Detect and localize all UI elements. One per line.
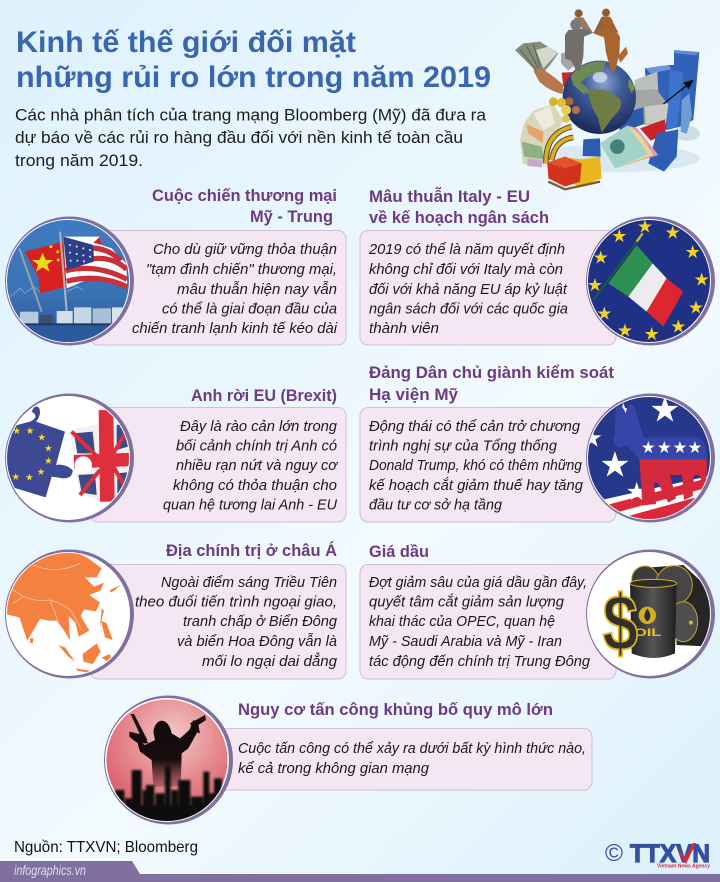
icon: EU and UK puzzle pieces: ★ xyxy=(26,426,34,436)
icon: oil barrels and dollar sign: $ xyxy=(603,579,638,668)
icon: Democratic donkey: ★ xyxy=(688,438,703,457)
card: oil text xyxy=(360,564,616,679)
card: trade war text xyxy=(90,230,346,345)
intro text: dự báo về các rủi ro hàng đầu đối với nền kinh tế toàn cầu xyxy=(15,128,463,147)
icon: Democratic donkey: ★ xyxy=(580,425,603,453)
icon: EU and UK puzzle pieces: ★ xyxy=(25,473,34,483)
icon: China and US flags over container ship xyxy=(0,216,135,348)
panel: oil price xyxy=(360,542,715,679)
intro text: trong năm 2019. xyxy=(15,151,143,170)
intro text xyxy=(15,106,487,170)
heading: trade war: Cuộc chiến thương mại xyxy=(152,186,337,205)
card: Brexit text: quan hệ tương lai Anh - EU xyxy=(163,496,337,514)
icon: Italian flag on EU stars: ★ xyxy=(688,297,704,317)
heading: Brexit: Anh rời EU (Brexit) xyxy=(191,386,337,405)
icon: Italian flag on EU stars: ★ xyxy=(617,321,633,341)
icon: Democratic donkey: ★ xyxy=(657,438,672,457)
header illustration: globe, trade and money xyxy=(515,9,700,189)
icon: map of Asia xyxy=(0,550,134,678)
card: oil text: Mỹ - Saudi Arabia và Mỹ - Iran xyxy=(369,633,562,650)
logo: TTXVN: TTXVN xyxy=(630,840,710,868)
card: Italy EU text: không chỉ đối với Italy mà còn xyxy=(369,261,563,278)
panel: Brexit xyxy=(5,386,346,522)
logo: TTXVN: © xyxy=(605,840,623,867)
panel: terror attack xyxy=(103,696,592,833)
icon: Democratic donkey: ★ xyxy=(599,446,631,485)
icon: EU and UK puzzle pieces: ★ xyxy=(37,433,46,443)
card: Asia text: Ngoài điểm sáng Triều Tiên xyxy=(161,574,337,591)
card: Brexit text: nhiều rạn nứt và nguy cơ xyxy=(176,457,339,474)
heading: Italy EU: Mâu thuẫn Italy - EU xyxy=(369,187,530,206)
intro text: Các nhà phân tích của trang mạng Bloomberg (Mỹ) đã đưa ra xyxy=(15,106,487,124)
card: oil text: quyết tâm cắt giảm sản lượng xyxy=(369,594,565,610)
card: oil text: Đợt giảm sâu của giá dầu gần đây, xyxy=(369,574,587,591)
title: Kinh tế thế giới đối mặt xyxy=(16,26,356,59)
icon: Italian flag on EU stars: ★ xyxy=(611,226,627,246)
card: Democrats text: Động thái có thể cản trở chương xyxy=(369,418,581,435)
icon: EU and UK puzzle pieces: ★ xyxy=(37,467,45,477)
card: trade war text: có thể là giai đoạn đầu của xyxy=(162,300,337,318)
panel: Asia geopolitics xyxy=(0,541,346,679)
icon: EU and UK puzzle pieces: ★ xyxy=(44,444,53,454)
card: Brexit text: bối cảnh chính trị Anh có xyxy=(176,438,337,454)
heading: Democrats xyxy=(369,363,614,404)
icon: Democratic donkey: ★ xyxy=(641,438,656,457)
footer bar xyxy=(0,861,720,882)
card: Democrats text: trình nghị sự của Tổng thống xyxy=(369,438,558,454)
title: những rủi ro lớn trong năm 2019 xyxy=(16,61,491,94)
icon: EU and UK puzzle pieces: ★ xyxy=(12,426,21,436)
panel: Democrats control House xyxy=(360,363,715,527)
panel: Italy EU xyxy=(360,187,715,347)
card: trade war text: "tạm đình chiến" thương mại, xyxy=(146,261,337,278)
icon: Italian flag on EU stars: ★ xyxy=(694,269,710,289)
icon: EU and UK puzzle pieces: ★ xyxy=(11,472,20,482)
card: Democrats text: kế hoạch cắt giảm thuế hay tăng xyxy=(369,477,584,494)
panel: trade war xyxy=(0,186,346,348)
card: oil text: tác động đến chính trị Trung Đông xyxy=(369,653,591,670)
source: Nguồn: TTXVN; Bloomberg xyxy=(14,839,198,856)
heading: terror: Nguy cơ tấn công khủng bố quy mô lớn xyxy=(238,700,553,719)
heading: Italy EU xyxy=(369,187,549,227)
card: terror text: kể cả trong không gian mạng xyxy=(238,760,430,777)
icon: Democratic donkey: ★ xyxy=(615,400,632,421)
card: Italy EU text xyxy=(360,230,616,345)
card: Democrats text: Donald Trump, khó có thêm những xyxy=(369,457,583,474)
icon: oil barrels and dollar sign xyxy=(586,550,715,678)
icon: Democratic donkey: ★ xyxy=(625,478,648,506)
card: Asia text: tranh chấp ở Biển Đông xyxy=(183,613,338,630)
heading: Democrats: Hạ viện Mỹ xyxy=(369,385,459,404)
icon: oil barrels and dollar sign: OIL xyxy=(634,627,661,639)
icon: Italian flag on EU stars xyxy=(585,216,715,347)
card: trade war text: chiến tranh lạnh kinh tế kéo dài xyxy=(132,320,338,337)
card: Italy EU text: 2019 có thể là năm quyết định xyxy=(368,241,565,258)
card: Asia text: mối lo ngại dai dẳng xyxy=(202,652,338,670)
icon: Italian flag on EU stars: ★ xyxy=(587,275,603,295)
icon: Italian flag on EU stars: ★ xyxy=(593,247,609,267)
icon: Italian flag on EU stars: ★ xyxy=(685,242,701,262)
icon: Italian flag on EU stars: ★ xyxy=(670,317,686,337)
card: trade war text: Cho dù giữ vững thỏa thuận xyxy=(153,241,337,258)
heading: trade war: Mỹ - Trung xyxy=(250,207,333,226)
card: Italy EU text: đối với khả năng EU áp kỷ luật xyxy=(369,281,568,298)
icon: armed silhouette over skyline xyxy=(103,696,233,833)
icon: EU and UK puzzle pieces: ★ xyxy=(44,456,53,466)
heading: oil: Giá dầu xyxy=(369,542,429,561)
icon: Democratic donkey: ★ xyxy=(673,438,688,457)
icon: Italian flag on EU stars: ★ xyxy=(644,324,660,344)
card: terror text xyxy=(200,728,592,790)
card: Asia text: theo đuổi tiến trình ngoại giao, xyxy=(135,594,337,610)
card: oil text: khai thác của OPEC, quan hệ xyxy=(369,613,555,630)
card: Brexit text: Đây là rào cản lớn trong xyxy=(180,418,338,435)
card: Asia text: và biển Hoa Đông vẫn là xyxy=(177,633,337,650)
card: Brexit text: không có thỏa thuận cho xyxy=(173,477,337,494)
icon: Democratic donkey: ★ xyxy=(649,391,681,430)
card: Democrats text xyxy=(360,408,616,522)
footer bar: infographics.vn xyxy=(14,862,86,878)
card: Italy EU text: thành viên xyxy=(369,320,439,337)
card: Italy EU text: ngân sách đối với các quốc gia xyxy=(369,300,568,318)
heading: Asia: Địa chính trị ở châu Á xyxy=(166,541,337,560)
heading: Italy EU: về kế hoạch ngân sách xyxy=(369,208,549,227)
card: terror text: Cuộc tấn công có thể xảy ra dưới bất kỳ hình thức nào, xyxy=(238,740,586,757)
logo: TTXVN: Vietnam News Agency xyxy=(657,864,710,870)
icon: EU and UK puzzle pieces xyxy=(5,394,134,522)
heading: trade war xyxy=(152,186,337,226)
card: Asia text xyxy=(90,564,346,679)
card: Democrats text: đầu tư cơ sở hạ tầng xyxy=(369,496,503,514)
card: trade war text: mâu thuẫn hiện nay vẫn xyxy=(177,281,337,298)
icon: Italian flag on EU stars: ★ xyxy=(665,223,681,243)
icon: Italian flag on EU stars: ★ xyxy=(596,303,612,323)
title xyxy=(16,26,491,94)
card: Brexit text xyxy=(90,408,346,522)
heading: Democrats: Đảng Dân chủ giành kiểm soát xyxy=(369,363,614,382)
icon: Democratic donkey xyxy=(580,391,715,527)
icon: Italian flag on EU stars: ★ xyxy=(637,217,653,237)
